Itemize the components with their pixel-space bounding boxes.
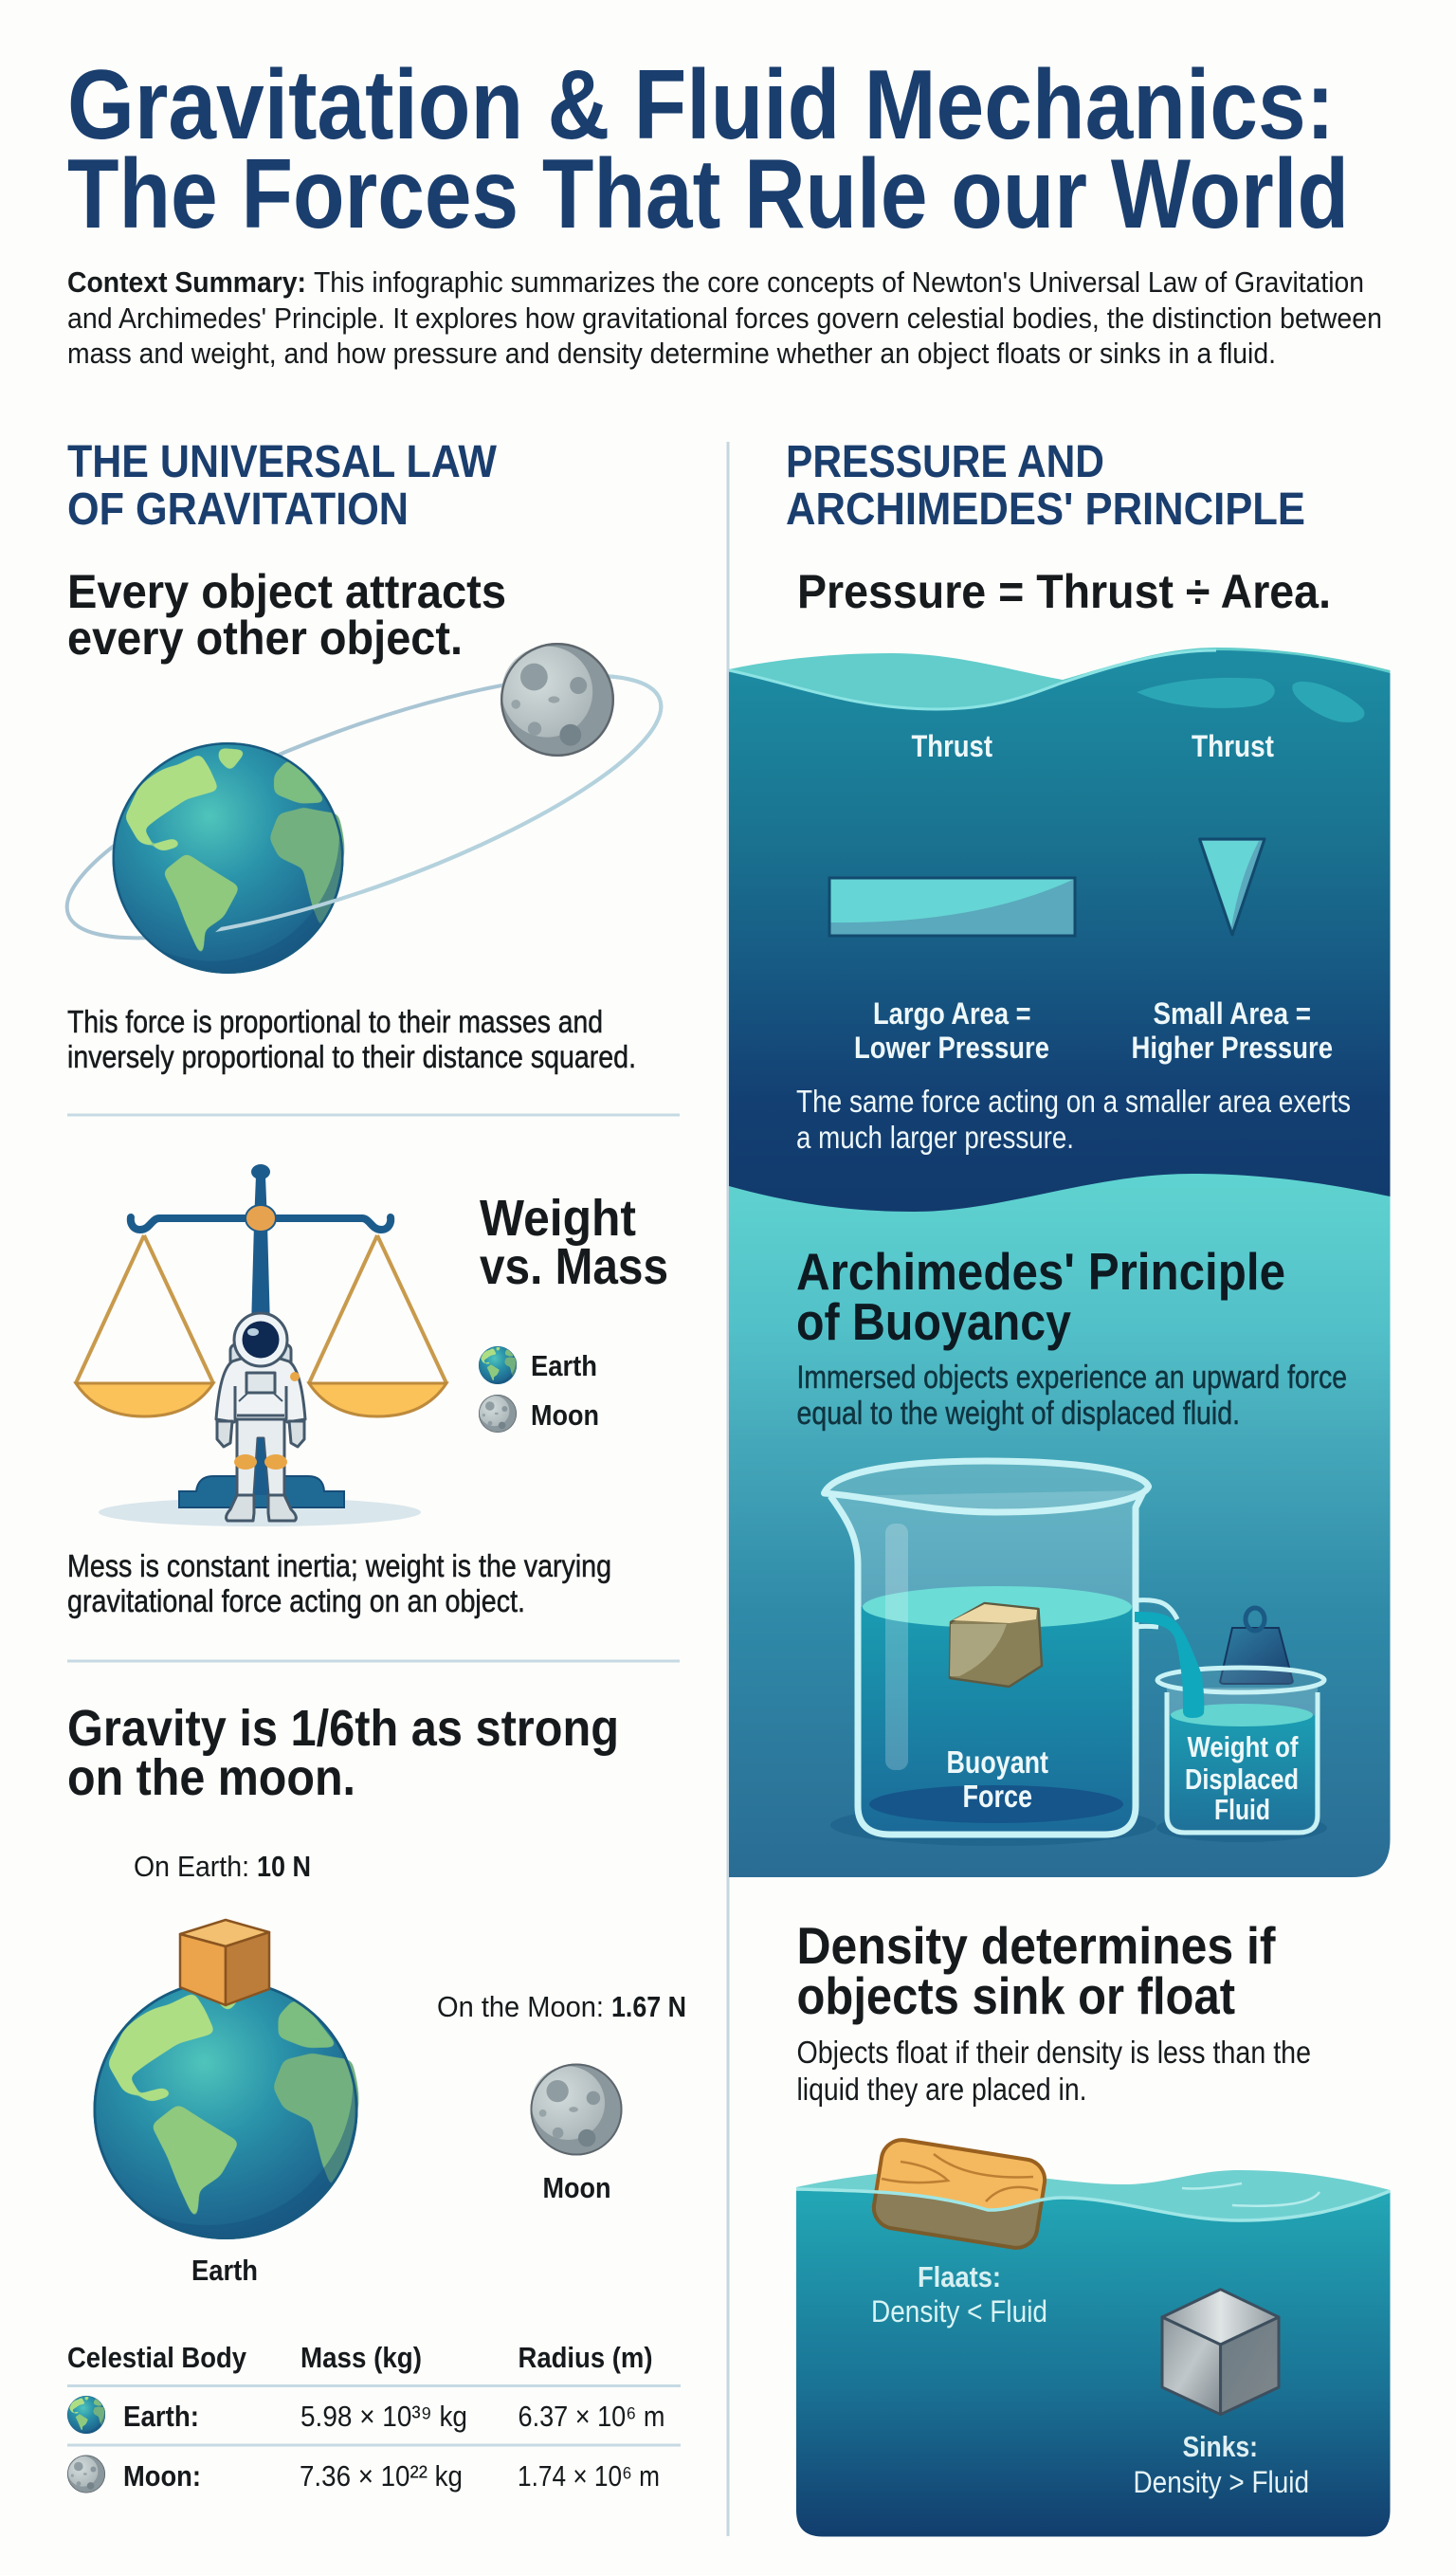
left pan: [76, 1235, 213, 1416]
ground shadow: [99, 1498, 421, 1526]
text: force proportional: inversely proportional to their distance squared.: [67, 1039, 636, 1074]
context summary: mass and weight, and how pressure and density determine whether an object floats or sinks in a fluid.: [67, 337, 1276, 370]
row: earth: [67, 2396, 665, 2434]
legend: moon: Moon: [531, 1398, 599, 1432]
label: moon: Moon: [542, 2171, 610, 2204]
heading: weight vs mass: vs. Mass: [480, 1238, 668, 1295]
label: weight of displaced fluid: Displaced: [1185, 1762, 1299, 1796]
heading: pressure formula: Pressure = Thrust ÷ Area.: [797, 565, 1331, 618]
pressure captions: Largo Area =: [873, 996, 1031, 1031]
panel: pressure: [729, 648, 1390, 1233]
heading: every object attracts: every other object.: [67, 612, 463, 665]
row: moon: 1.74 × 10⁶ m: [518, 2459, 660, 2493]
heading: every object attracts: [67, 565, 506, 665]
table header: Mass (kg): [300, 2341, 422, 2374]
context summary: Context Summary:: [67, 265, 306, 299]
overflow spout: [1135, 1600, 1177, 1629]
log under water: [872, 2194, 1044, 2250]
legend: [479, 1346, 599, 1433]
heading: pressure and archimedes: [786, 437, 1305, 535]
small area triangle: [1200, 839, 1265, 935]
context summary: This infographic summarizes the core concepts of Newton's Universal Law of Gravitation: [314, 265, 1364, 299]
label: weight of displaced fluid: Weight of: [1187, 1730, 1299, 1763]
label: buoyant force: Force: [963, 1779, 1032, 1814]
text: density: liquid they are placed in.: [796, 2072, 1086, 2107]
label: on earth: 10 N: [257, 1850, 311, 1883]
earth: [112, 742, 344, 974]
label: floats: [871, 2260, 1047, 2328]
title: [67, 50, 1349, 249]
heading: gravity 1/6th: Gravity is 1/6th as strong: [67, 1700, 619, 1757]
label: earth: Earth: [191, 2254, 258, 2287]
row: moon: 7.36 × 10²² kg: [300, 2459, 463, 2493]
orbit diagram: [64, 643, 664, 974]
label: sinks: Density > Fluid: [1134, 2465, 1309, 2499]
thrust labels: Thrust: [1192, 729, 1274, 763]
row: earth: Earth:: [123, 2400, 199, 2433]
archimedes text: equal to the weight of displaced fluid.: [796, 1396, 1240, 1432]
pressure captions: Higher Pressure: [1132, 1031, 1333, 1065]
heading: density: Density determines if: [796, 1916, 1276, 1975]
metal cube: [1162, 2290, 1279, 2415]
orange box: [180, 1920, 269, 2005]
label: on the moon: 1.67 N: [611, 1990, 686, 2023]
orbit ellipse: [41, 625, 687, 989]
weight: [1220, 1608, 1293, 1684]
right pan: [309, 1235, 446, 1416]
heading: archimedes principle: Archimedes' Principle: [796, 1242, 1285, 1301]
water surface back: [796, 2170, 1390, 2223]
text: density: Objects float if their density is less than the: [796, 2035, 1311, 2070]
pressure note: The same force acting on a smaller area exerts: [796, 1084, 1351, 1119]
context summary: and Archimedes' Principle. It explores how gravitational forces govern celestial bodies, the distinction between: [67, 301, 1382, 335]
water stream: [1135, 1612, 1204, 1718]
large earth: [93, 1980, 358, 2239]
pressure note: [796, 1084, 1351, 1155]
moon: [500, 643, 614, 757]
heading: archimedes principle: of Buoyancy: [796, 1292, 1071, 1351]
heading: archimedes principle: [796, 1242, 1285, 1351]
heading: pressure and archimedes: PRESSURE AND: [786, 437, 1104, 487]
balance scale with astronaut: [76, 1164, 446, 1526]
archimedes text: Immersed objects experience an upward force: [796, 1360, 1347, 1396]
heading: universal law of gravitation: THE UNIVERSAL LAW: [67, 437, 498, 487]
orbit front arc: [214, 674, 664, 933]
scale base: [179, 1476, 344, 1507]
label: weight of displaced fluid: Fluid: [1214, 1793, 1270, 1826]
large area rectangle: [829, 878, 1075, 936]
small beaker: [1167, 1688, 1318, 1833]
small beaker rim: [1157, 1668, 1324, 1692]
text: mass vs weight: gravitational force acting on an object.: [67, 1583, 525, 1618]
panel: archimedes: [729, 1174, 1390, 1877]
scale post: [251, 1176, 270, 1493]
label: sinks: Sinks:: [1183, 2430, 1258, 2463]
beaker shadows: [830, 1804, 1327, 1846]
astronaut: [216, 1313, 305, 1521]
text: force proportional: This force is proportional to their masses and: [67, 1004, 603, 1039]
heading: density: objects sink or float: [796, 1966, 1235, 2025]
heading: pressure and archimedes: ARCHIMEDES' PRINCIPLE: [786, 484, 1305, 535]
text: force proportional: [67, 1004, 636, 1074]
earth with box: [93, 1920, 358, 2239]
data table: [67, 2341, 681, 2493]
wooden block: [950, 1603, 1042, 1687]
heading: every object attracts: Every object attracts: [67, 565, 506, 618]
heading: universal law of gravitation: OF GRAVITATION: [67, 484, 409, 535]
archimedes text: [796, 1360, 1347, 1432]
heading: weight vs mass: [480, 1190, 668, 1295]
panel: sink or float: [796, 2137, 1390, 2537]
thrust labels: Thrust: [912, 729, 992, 763]
large beaker: [825, 1461, 1149, 1835]
table header: [67, 2341, 652, 2374]
label: sinks: [1134, 2430, 1309, 2499]
heading: weight vs mass: Weight: [480, 1190, 636, 1247]
column divider: [726, 442, 730, 2536]
text: density: [796, 2035, 1311, 2107]
label: floats: Density < Fluid: [871, 2294, 1047, 2328]
table header: Radius (m): [518, 2341, 652, 2374]
pressure captions: Small Area =: [1153, 996, 1311, 1031]
floating log: [871, 2137, 1047, 2251]
label: buoyant force: [946, 1744, 1048, 1814]
label: on the moon: On the Moon:: [437, 1990, 604, 2023]
heading: gravity 1/6th: on the moon.: [67, 1749, 355, 1806]
row: earth: 5.98 × 10³⁹ kg: [300, 2400, 467, 2433]
text: mass vs weight: [67, 1548, 611, 1618]
pressure captions: [854, 996, 1333, 1065]
heading: density: [796, 1916, 1276, 2025]
legend: earth: Earth: [531, 1349, 597, 1382]
row: moon: [67, 2456, 660, 2493]
label: buoyant force: Buoyant: [946, 1744, 1048, 1780]
label: weight of displaced fluid: [1185, 1730, 1299, 1826]
text: mass vs weight: Mess is constant inertia; weight is the varying: [67, 1548, 611, 1583]
row: moon: Moon:: [123, 2459, 201, 2493]
row: earth: 6.37 × 10⁶ m: [518, 2400, 665, 2433]
label: floats: Flaats:: [918, 2260, 1001, 2293]
label: on earth: On Earth:: [134, 1850, 249, 1883]
pressure captions: Lower Pressure: [854, 1031, 1049, 1065]
pressure note: a much larger pressure.: [796, 1120, 1074, 1155]
heading: universal law of gravitation: [67, 437, 498, 535]
heading: gravity 1/6th: [67, 1700, 619, 1806]
context summary: [67, 265, 1382, 370]
water body: [796, 2189, 1390, 2537]
beam: [131, 1217, 391, 1230]
thrust labels: [912, 729, 1274, 763]
table header: Celestial Body: [67, 2341, 247, 2374]
moon: [531, 2063, 622, 2156]
